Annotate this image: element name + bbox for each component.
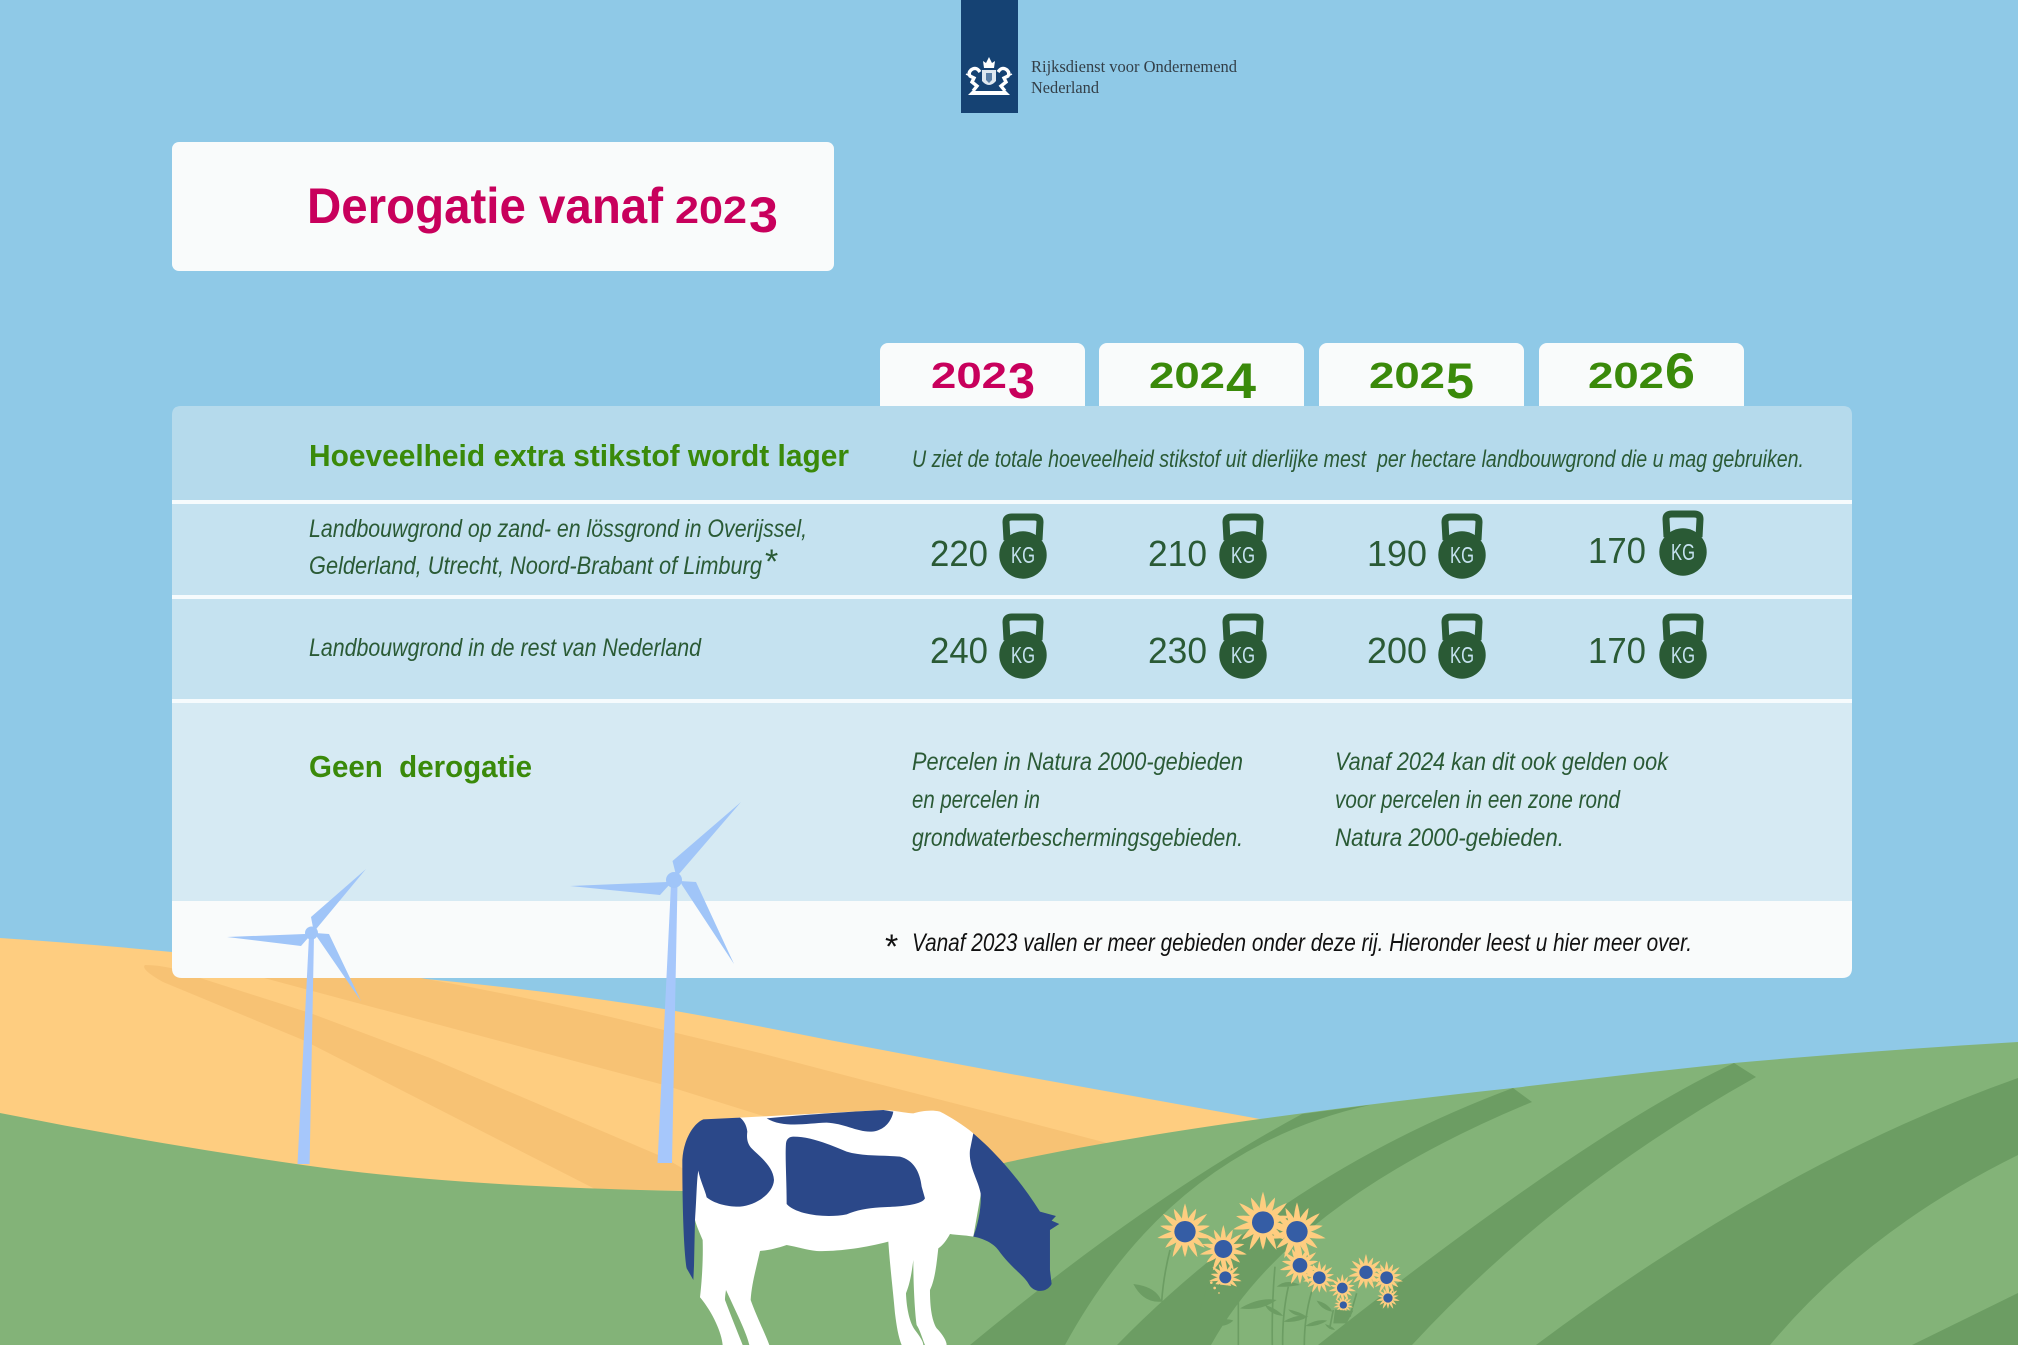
year 2023: 202 [931, 355, 1007, 396]
row heading: nitrogen: Hoeveelheid extra stikstof wordt lager [309, 438, 849, 473]
value 170 row 2 [1588, 617, 1707, 679]
value 190 [1367, 517, 1486, 579]
value 200 [1367, 617, 1486, 679]
value 240: KG [1011, 642, 1035, 668]
wind turbine left [227, 869, 366, 1164]
value 240: 240 [930, 630, 988, 671]
value 240 [930, 617, 1047, 679]
value 230: KG [1231, 642, 1255, 668]
year 2023: 3 [1008, 353, 1035, 409]
row 2 label: Landbouwgrond in de rest van Nederland [309, 634, 702, 662]
year 2024: 4 [1226, 353, 1256, 409]
value 230: 230 [1148, 630, 1207, 671]
sunflowers [1133, 1192, 1403, 1345]
value 170 row 1: KG [1671, 539, 1695, 565]
year 2025: 202 [1369, 355, 1445, 396]
header explanation: U ziet de totale hoeveelheid stikstof uit dierlijke mest per hectare landbouwgrond die u mag gebruiken. [912, 446, 1804, 473]
value 210: 210 [1148, 533, 1207, 574]
heading: no derogation: Geen derogatie [309, 749, 532, 784]
year 2026: 202 [1588, 355, 1664, 396]
value 210 [1148, 517, 1267, 579]
row 1 label: Gelderland, Utrecht, Noord-Brabant of Limburg [309, 552, 762, 580]
value 200: 200 [1367, 630, 1427, 671]
green hills [0, 1042, 2018, 1345]
value 170 row 1 [1588, 514, 1707, 576]
logo text: Nederland [1031, 78, 1099, 97]
year 2025: 5 [1446, 353, 1474, 409]
value 230 [1148, 617, 1267, 679]
year 2026: 6 [1665, 343, 1695, 399]
value 220: 220 [930, 533, 988, 574]
title: 202 [675, 190, 747, 232]
cow [682, 1110, 1059, 1345]
no derogation text column 2: voor percelen in een zone rond [1335, 786, 1621, 814]
row 1 label: Landbouwgrond op zand- en lössgrond in Overijssel, [309, 515, 807, 543]
title: 3 [749, 187, 778, 243]
value 190: KG [1450, 542, 1474, 568]
value 200: KG [1450, 642, 1474, 668]
no derogation text column 1: en percelen in [912, 786, 1040, 814]
logo: Rijksoverheid [961, 0, 1241, 113]
year 2024: 202 [1149, 355, 1225, 396]
orange field hill [0, 938, 1260, 1300]
year tabs [880, 343, 1744, 418]
value 170 row 2: 170 [1588, 630, 1646, 671]
no derogation text column 2: Natura 2000-gebieden. [1335, 824, 1564, 852]
row 1 label: * [765, 543, 778, 581]
no derogation text column 2: Vanaf 2024 kan dit ook gelden ook [1335, 748, 1669, 776]
footnote: * [885, 928, 898, 966]
value 170 row 2: KG [1671, 642, 1695, 668]
data table panel [172, 406, 1852, 978]
value 220 [930, 517, 1047, 579]
value 170 row 1: 170 [1588, 530, 1646, 571]
wind turbine right [570, 802, 741, 1163]
footnote: Vanaf 2023 vallen er meer gebieden onder deze rij. Hieronder leest u hier meer over. [912, 929, 1692, 957]
value 220: KG [1011, 542, 1035, 568]
title card [172, 142, 834, 271]
icon: royal coat of arms [966, 57, 1012, 95]
value 210: KG [1231, 542, 1255, 568]
value 190: 190 [1367, 533, 1427, 574]
title: Derogatie vanaf [307, 178, 663, 234]
no derogation text column 1: Percelen in Natura 2000-gebieden [912, 748, 1243, 776]
no derogation text column 1: grondwaterbeschermingsgebieden. [912, 824, 1243, 852]
logo text: Rijksdienst voor Ondernemend [1031, 57, 1237, 76]
